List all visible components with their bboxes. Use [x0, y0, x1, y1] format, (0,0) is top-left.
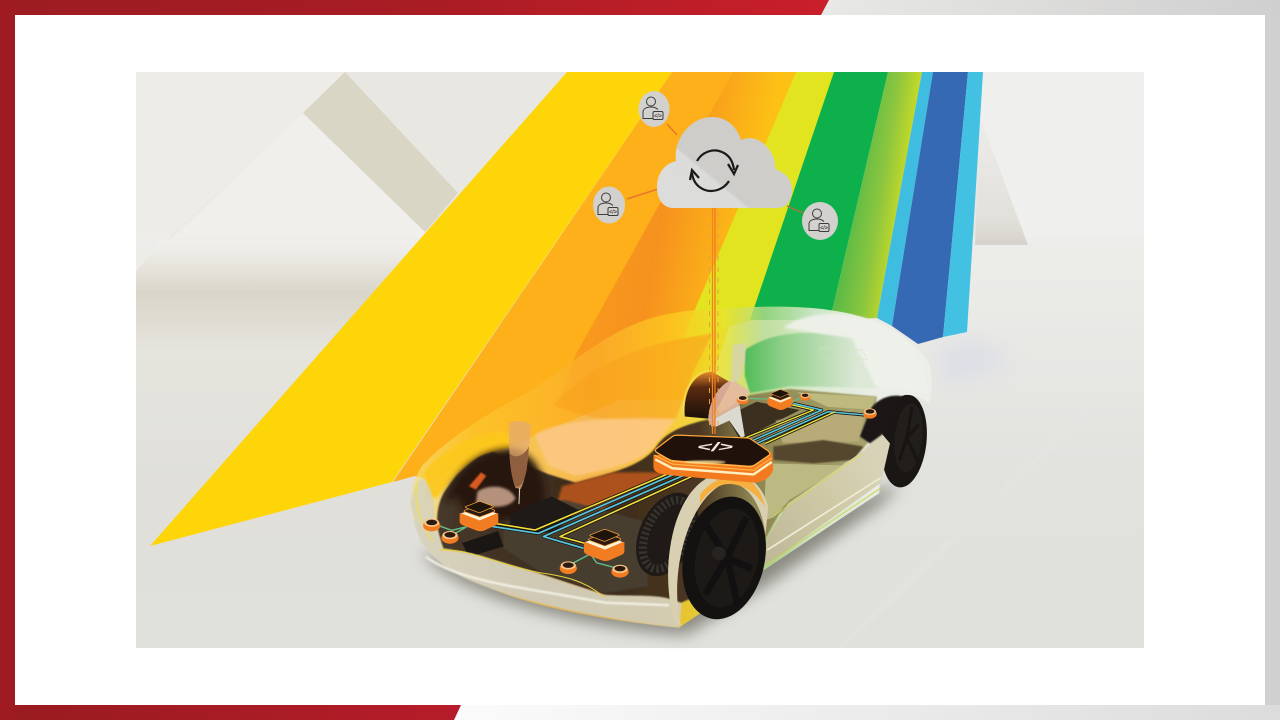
front wheel: [671, 489, 777, 627]
front wire: cyan pair: [488, 467, 700, 548]
interior: rear khaki floor: [776, 410, 864, 443]
sensor module: front left: [460, 501, 498, 531]
interior: rear upper strip: [797, 392, 876, 410]
glass body shell: [410, 307, 932, 628]
front wire: yellow lower: [560, 469, 708, 543]
front-right tyre with tread: [624, 483, 711, 586]
node: headlamp right: [441, 531, 459, 544]
dashboard peach glow: [534, 418, 676, 476]
node: headlamp left: [423, 519, 440, 531]
icon: cloud with sync arrows: [657, 117, 792, 208]
roof and rear glass highlight: [783, 314, 928, 393]
rainbow stripes rising behind the car: [150, 72, 983, 546]
interior: rear glass panel: [727, 402, 800, 440]
interior: front floor greys: [503, 500, 648, 593]
stripe: deep orange: [560, 72, 812, 400]
front suspension strut: [509, 421, 531, 504]
stripe: blue: [892, 72, 968, 344]
satellite wires: [436, 525, 471, 535]
stripe: green gradient: [830, 72, 922, 320]
interior: pale low floor: [764, 463, 845, 521]
central computer module: [653, 435, 773, 483]
code symbol: </>: [695, 440, 736, 454]
node: floor left: [560, 561, 577, 574]
rear wheel arch: [860, 396, 903, 443]
icon: developer left: [593, 186, 625, 224]
sensor module: front floor: [584, 529, 624, 561]
connector: top developer to cloud: [667, 124, 677, 135]
front wire: yellow top: [495, 467, 683, 530]
icon: developer top: [638, 91, 670, 127]
wiring harness: [436, 397, 867, 569]
stripe: yellow: [150, 72, 672, 546]
connector: right developer to cloud: [787, 206, 803, 213]
interior: dark rear seat: [773, 440, 863, 463]
sensor module: rear: [767, 390, 793, 410]
stripe: cyan: [877, 72, 933, 326]
vertical data link from cloud to central computer: [710, 208, 718, 434]
cloud shape: [657, 117, 792, 208]
side window: [745, 333, 878, 393]
rear wire bundle: [740, 403, 813, 440]
stripe: green: [750, 72, 888, 320]
rear suspension strut and arch: [683, 343, 750, 438]
engine block: [510, 497, 579, 534]
interior: front and centre floor pan: [437, 389, 877, 603]
front bumper: [414, 521, 682, 628]
node: floor right: [611, 565, 629, 578]
node: rear a: [737, 395, 749, 404]
sync arrows: [690, 150, 738, 191]
front fender arch: [668, 472, 768, 626]
node: rear c: [863, 408, 877, 419]
interior: central orange glow: [552, 472, 676, 521]
stripe: light orange: [393, 72, 733, 482]
stripe: outer cyan: [943, 72, 983, 337]
car: transparent vehicle with electronic architecture: [410, 307, 932, 634]
hood yellow band: [424, 431, 517, 500]
node: rear b: [800, 393, 810, 401]
rear wheel: [877, 392, 931, 490]
side sill: [765, 433, 890, 565]
connector: left developer to cloud: [627, 189, 658, 199]
rear window outline: [821, 348, 867, 359]
car shadow on floor: [421, 483, 900, 634]
stripe: yellow green: [682, 72, 840, 340]
front-left translucent corner: [410, 479, 443, 557]
illustration panel background: studio walls and floor: [136, 72, 1144, 648]
icon: developer right: [802, 202, 838, 240]
wire casing: [488, 403, 867, 548]
windshield tint: [553, 334, 712, 421]
front-left wheel well: [445, 448, 545, 521]
